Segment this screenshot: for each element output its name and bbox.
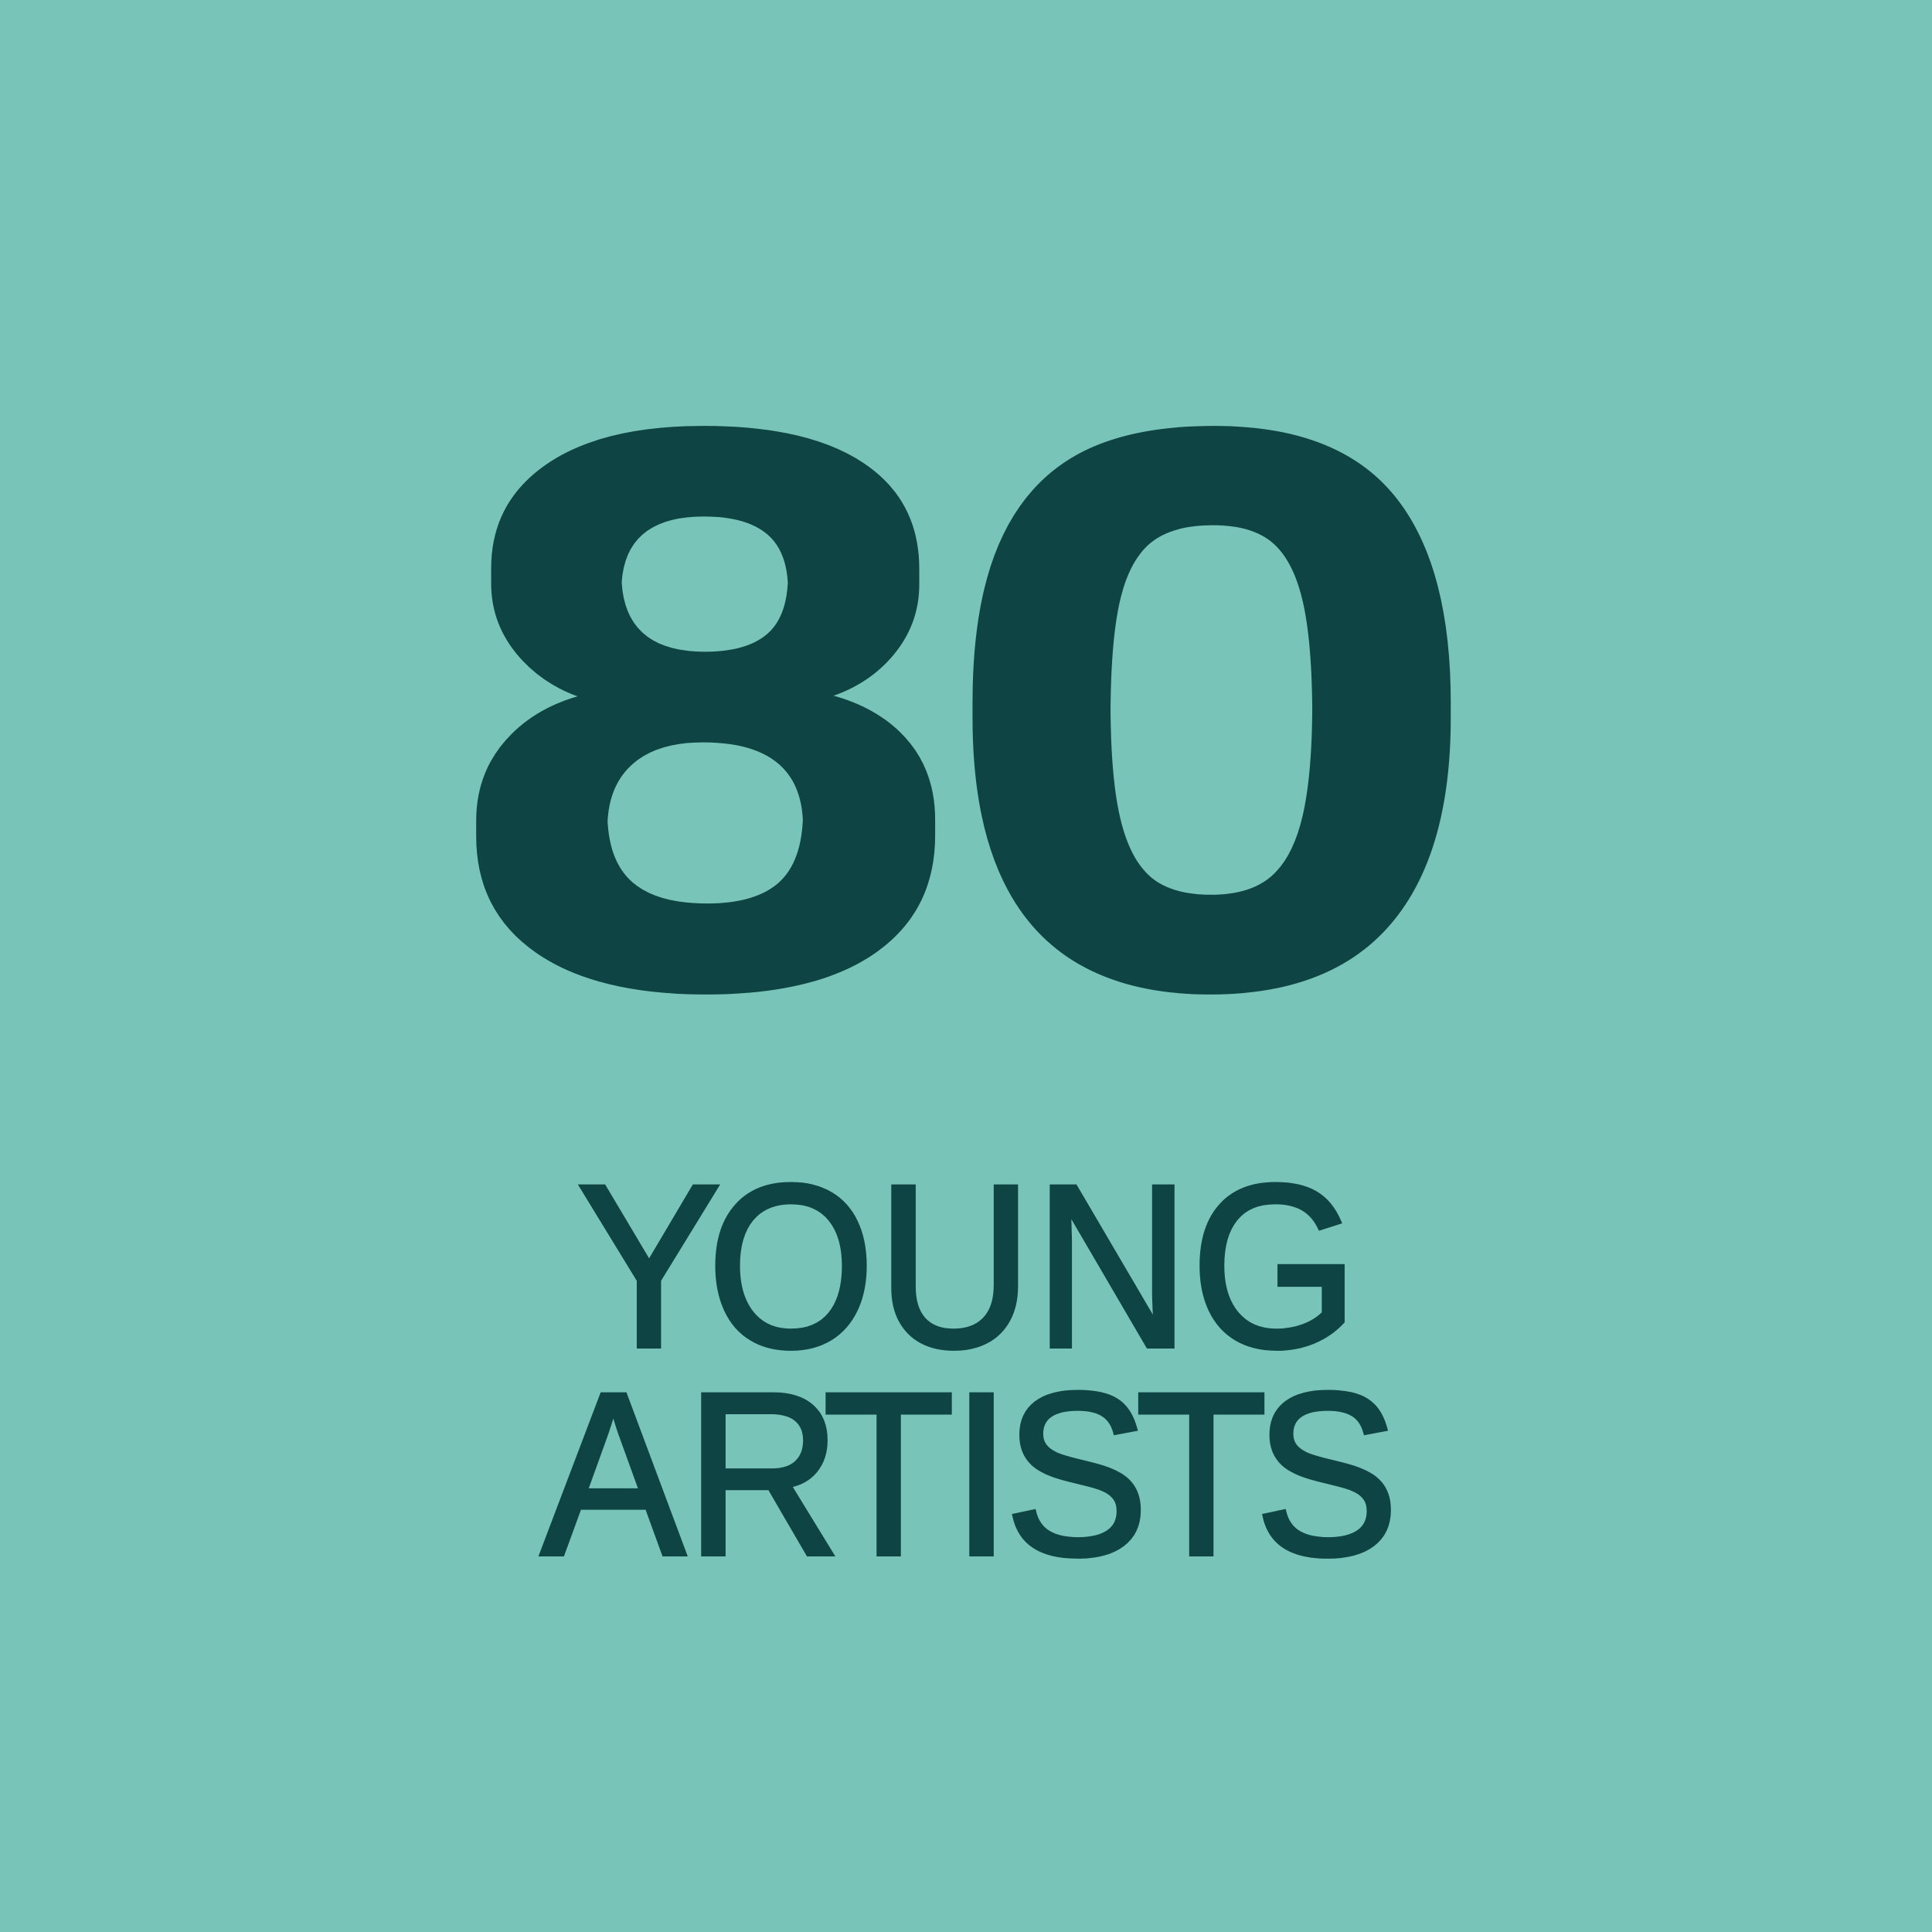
- big number: 80: [447, 272, 1492, 1145]
- caption: YOUNG ARTISTS: [541, 1138, 1399, 1604]
- caption: YOUNG ARTISTS: ARTISTS: [541, 1345, 1399, 1604]
- big number: 80: 0: [933, 272, 1492, 1145]
- big number: 80: 8: [447, 273, 964, 1145]
- caption: YOUNG ARTISTS: YOUNG: [577, 1138, 1359, 1396]
